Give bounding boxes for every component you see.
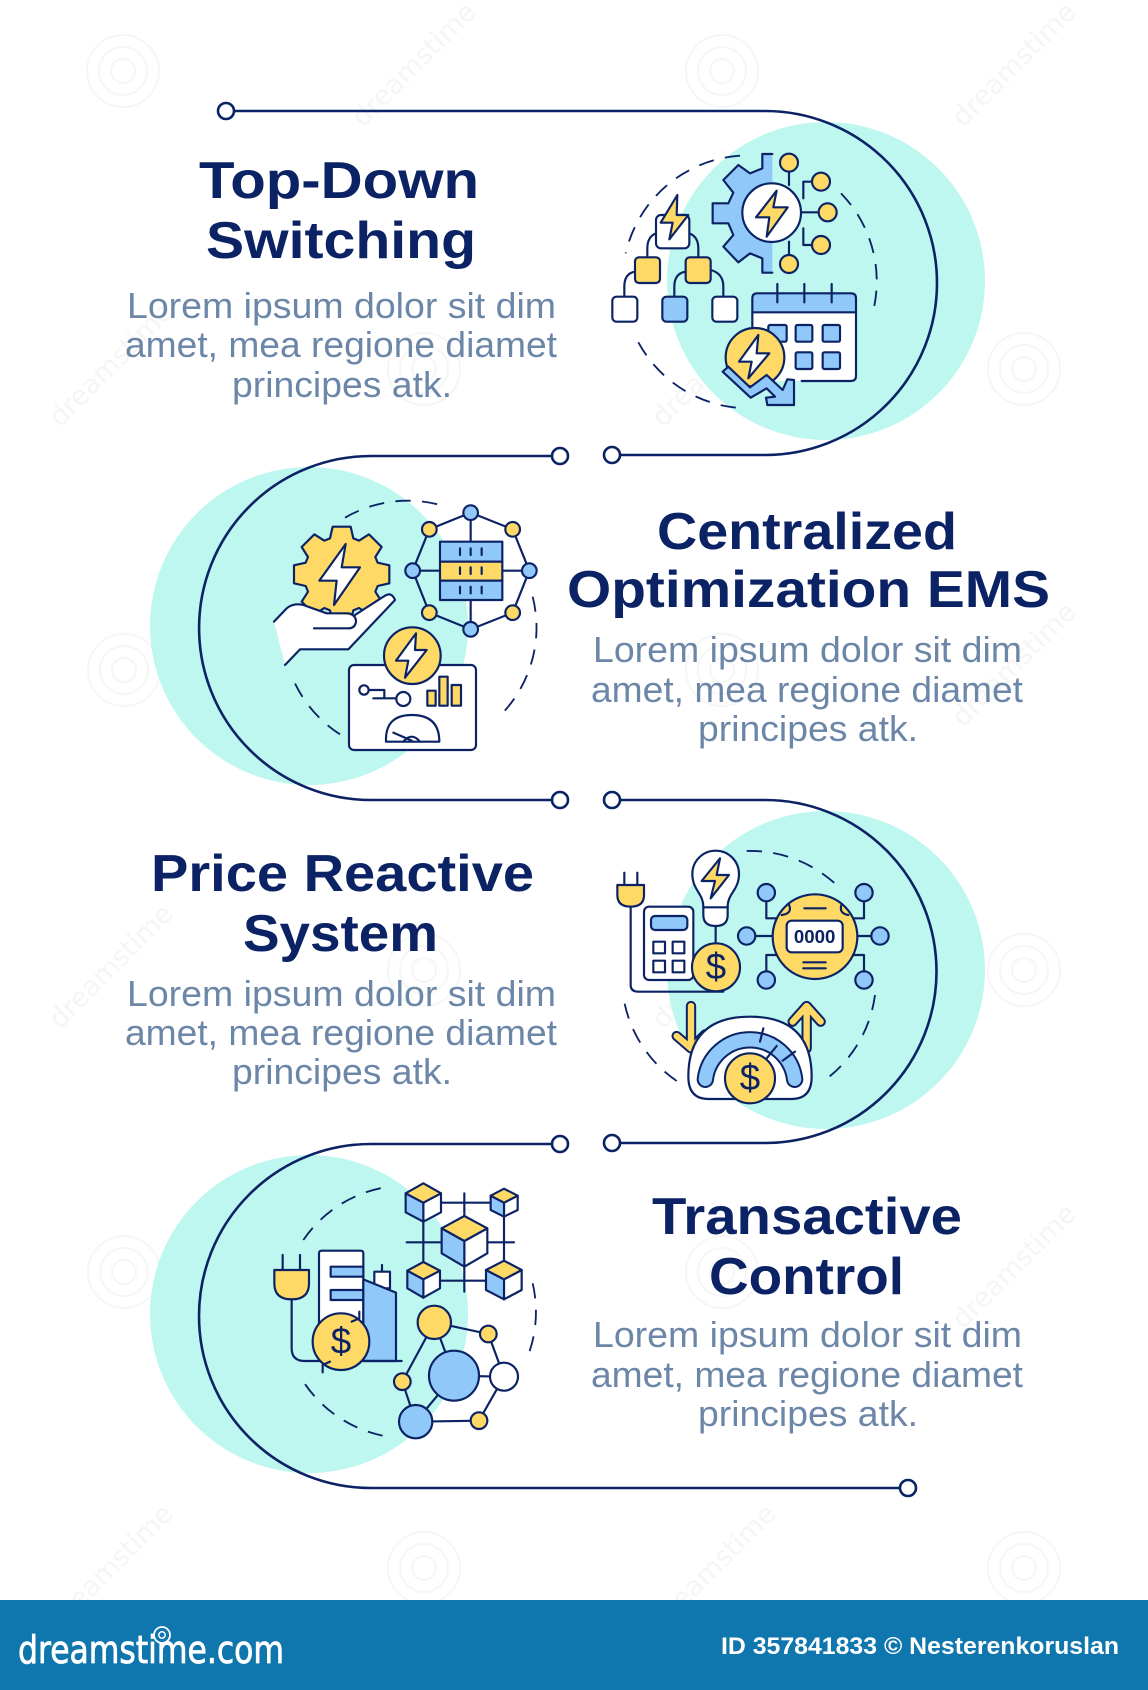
heading: Centralized Optimization EMS: Optimization EMS (567, 561, 1050, 619)
watermark pattern: dreamstime (946, 1198, 1083, 1335)
icon: plug, building and coin: $ (331, 1320, 351, 1361)
teal circle backdrops (150, 122, 985, 1473)
text block: step 2: Lorem ipsum dolor sit dim (593, 629, 1022, 670)
icon: half gear with lightning (713, 154, 837, 273)
watermark pattern: dreamstime (43, 296, 180, 433)
connector line: step 2 (199, 448, 568, 808)
icon: switching tree (612, 195, 737, 322)
icon: yellow gear with lightning (294, 527, 389, 622)
icon: plug and calculator (617, 873, 723, 992)
image credit: ID 357841833 © Nesterenkoruslan (721, 1633, 1119, 1660)
connector line: step 4 (199, 1136, 916, 1496)
connector line: step 1 (218, 103, 937, 463)
text block: step 4 (591, 1314, 1023, 1434)
icon: light bulb and coin (692, 851, 740, 991)
watermark pattern: dreamstime (646, 1498, 783, 1635)
footer banner (0, 1600, 1148, 1690)
text block: step 3: principes atk. (232, 1051, 452, 1092)
watermark pattern: dreamstime (346, 596, 483, 733)
icon: open hand (274, 594, 395, 665)
icon: smart meter network: 0000 (794, 926, 835, 947)
heading: Price Reactive System (151, 845, 534, 963)
heading: Top-Down Switching: Top-Down (199, 152, 479, 210)
icon: price gauge: $ (740, 1057, 760, 1098)
watermark pattern: dreamstime (946, 596, 1083, 733)
heading: Top-Down Switching: Switching (206, 212, 476, 270)
text block: step 3: amet, mea regione diamet (125, 1012, 557, 1053)
text block: step 4: amet, mea regione diamet (591, 1354, 1023, 1395)
icon: molecule network (394, 1306, 518, 1438)
text block: step 1: Lorem ipsum dolor sit dim (127, 285, 556, 326)
icon group: transactive control (274, 1183, 536, 1438)
dashed ring (626, 156, 877, 408)
icon: light bulb and coin: $ (706, 946, 726, 987)
text block: step 2: principes atk. (698, 708, 918, 749)
text block: step 4: Lorem ipsum dolor sit dim (593, 1314, 1022, 1355)
text block: step 2 (591, 629, 1023, 749)
heading: Centralized Optimization EMS: Centralized (657, 503, 957, 561)
icon: server network (405, 505, 537, 637)
heading: Top-Down Switching (199, 152, 479, 270)
watermark pattern: dreamstime (646, 898, 783, 1035)
heading: Price Reactive System: System (243, 905, 438, 963)
watermark pattern: dreamstime (43, 898, 180, 1035)
icon group: top-down switching (612, 154, 877, 408)
icon: calendar with falling energy (723, 284, 856, 405)
watermark pattern: dreamstime (43, 1498, 180, 1635)
text block: step 4: principes atk. (698, 1393, 918, 1434)
heading: Price Reactive System: Price Reactive (151, 845, 534, 903)
heading: Transactive Control: Transactive (652, 1188, 962, 1246)
text block: step 3: Lorem ipsum dolor sit dim (127, 973, 556, 1014)
connector line: step 3 (604, 792, 936, 1151)
icon: energy dashboard (349, 627, 476, 750)
text block: step 1: principes atk. (232, 364, 452, 405)
text block: step 2: amet, mea regione diamet (591, 669, 1023, 710)
watermark pattern: dreamstime (946, 0, 1083, 133)
heading: Transactive Control (652, 1188, 962, 1306)
dashed ring (623, 851, 875, 1081)
dashed ring (293, 501, 537, 734)
icon group: centralized optimization (274, 501, 537, 750)
dashed ring (301, 1187, 536, 1436)
icon: smart meter network (738, 884, 889, 989)
watermark pattern: dreamstime (346, 1198, 483, 1335)
icon: plug, building and coin (274, 1251, 402, 1372)
text block: step 3 (125, 973, 557, 1092)
watermark pattern: dreamstime (346, 0, 483, 133)
icon: blockchain grid (406, 1183, 522, 1299)
watermark pattern: dreamstime (646, 296, 783, 433)
text block: step 1 (125, 285, 557, 405)
heading: Centralized Optimization EMS (567, 503, 1050, 619)
logo: dreamstime: dreamstime.com (18, 1628, 284, 1672)
icon group: price reactive (617, 851, 889, 1103)
icon: price gauge (688, 1017, 812, 1103)
heading: Transactive Control: Control (709, 1248, 904, 1306)
text block: step 1: amet, mea regione diamet (125, 324, 557, 365)
icon: down and up arrows (677, 1006, 821, 1048)
